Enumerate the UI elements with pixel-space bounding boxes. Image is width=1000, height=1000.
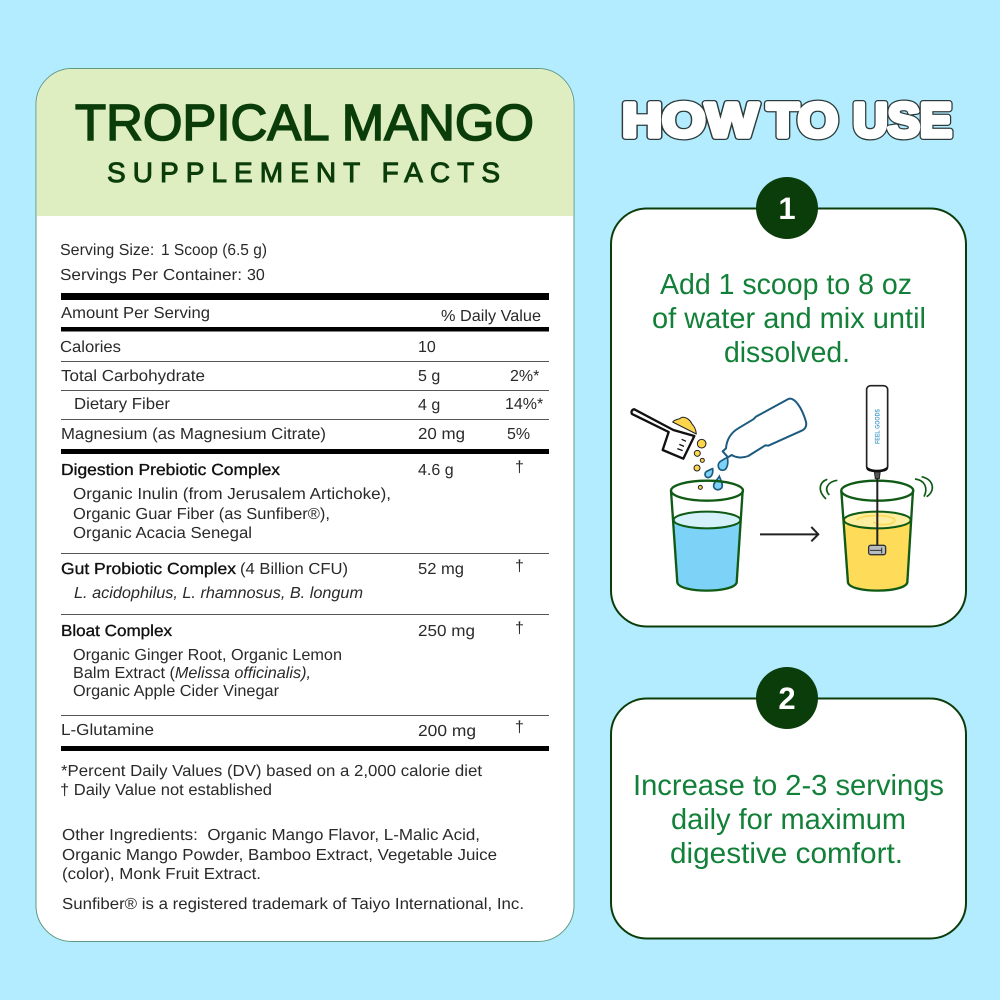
step 2 text [633, 770, 944, 870]
nutrition table: Organic Ginger Root, Organic Lemon [73, 647, 342, 664]
other ingredients: Organic Mango Powder, Bamboo Extract, Vegetable Juice [62, 847, 497, 864]
nutrition table: Organic Apple Cider Vinegar [73, 683, 280, 700]
footnotes [60, 763, 483, 799]
nutrition table: L. acidophilus, L. rhamnosus, B. longum [74, 585, 363, 602]
panel: step 1 [611, 177, 966, 626]
nutrition table: Calories [60, 339, 121, 356]
icon: vibration marks [820, 477, 932, 499]
other ingredients: Sunfiber® is a registered trademark of Taiyo International, Inc. [62, 896, 524, 913]
heading: how to use [622, 94, 952, 148]
icon: powder dots [694, 439, 706, 489]
nutrition table: † [515, 459, 524, 476]
icon: milk frother [867, 386, 888, 555]
step 1 badge: 1 [778, 191, 796, 226]
nutrition table: Bloat Complex [61, 623, 172, 640]
other ingredients: (color), Monk Fruit Extract. [62, 866, 261, 883]
panel: step 2 [611, 667, 966, 938]
step 1 badge [756, 177, 818, 239]
heading: how to use: TO [767, 94, 838, 148]
step 2 text: digestive comfort. [670, 838, 903, 870]
step 2 text: daily for maximum [671, 804, 906, 836]
serving information: 30 [247, 267, 265, 284]
nutrition table: 5% [507, 426, 530, 443]
nutrition table: Dietary Fiber [74, 396, 171, 413]
icon: scoop with powder [632, 409, 696, 459]
step 2 text: Increase to 2-3 servings [633, 770, 944, 802]
nutrition table: 2%* [510, 368, 539, 385]
other ingredients [62, 827, 524, 913]
serving information: Servings Per Container: [60, 267, 242, 284]
illustration: mixing steps [632, 386, 932, 591]
step 1 text: of water and mix until [652, 303, 926, 335]
step 1 text: Add 1 scoop to 8 oz [660, 269, 912, 301]
serving information: Serving Size: [60, 242, 154, 259]
title: TROPICAL MANGO [75, 94, 534, 151]
nutrition table: 4.6 g [418, 462, 454, 479]
step 2 badge [756, 667, 818, 729]
icon: water drops [705, 457, 728, 490]
nutrition table: Organic Acacia Senegal [73, 525, 252, 542]
nutrition table: † [515, 558, 524, 575]
nutrition table: 4 g [418, 397, 440, 414]
nutrition table: (4 Billion CFU) [240, 561, 348, 578]
nutrition table: Organic Inulin (from Jerusalem Artichoke), [73, 486, 391, 503]
heading: how to use: TO [767, 94, 838, 148]
footnotes: *Percent Daily Values (DV) based on a 2,000 calorie diet [61, 763, 483, 780]
heading: how to use: USE [853, 94, 952, 148]
panel: supplement facts [36, 68, 574, 942]
serving information: 1 Scoop (6.5 g) [161, 242, 267, 259]
panel header [37, 69, 573, 216]
nutrition table: Magnesium (as Magnesium Citrate) [61, 426, 326, 443]
nutrition table: 200 mg [418, 723, 476, 740]
nutrition table: Digestion Prebiotic Complex [61, 462, 280, 479]
nutrition table: 10 [418, 339, 436, 356]
nutrition table: 14%* [505, 396, 543, 413]
nutrition table: 20 mg [418, 426, 465, 443]
step 1 text: dissolved. [724, 337, 850, 369]
nutrition table: 5 g [418, 368, 440, 385]
heading: how to use: HOW [622, 94, 759, 148]
nutrition table: L-Glutamine [61, 722, 154, 739]
other ingredients: Other Ingredients: Organic Mango Flavor, L-Malic Acid, [62, 827, 480, 844]
nutrition table [60, 293, 549, 751]
subtitle: SUPPLEMENT FACTS [107, 157, 500, 188]
step 1 text [652, 269, 926, 369]
footnotes: † Daily Value not established [60, 782, 272, 799]
nutrition table: Balm Extract (Melissa officinalis), [73, 665, 311, 682]
icon: glass of water [671, 481, 743, 591]
frother label: FEEL GOODS [874, 409, 881, 444]
heading: how to use: USE [853, 94, 952, 148]
icon: water bottle [723, 399, 806, 457]
icon: glass of mango drink [841, 481, 913, 591]
nutrition table: Organic Guar Fiber (as Sunfiber®), [73, 506, 330, 523]
nutrition table: † [515, 620, 524, 637]
nutrition table: † [515, 719, 524, 736]
nutrition table: % Daily Value [441, 308, 541, 325]
nutrition table: Total Carbohydrate [61, 368, 205, 385]
nutrition table: Gut Probiotic Complex [61, 561, 236, 578]
arrow [760, 527, 818, 541]
heading: how to use: HOW [622, 94, 759, 148]
nutrition table: 52 mg [418, 561, 464, 578]
nutrition table: Amount Per Serving [61, 305, 210, 322]
step 2 badge: 2 [778, 681, 796, 716]
nutrition table: 250 mg [418, 623, 475, 640]
serving information [60, 242, 267, 284]
